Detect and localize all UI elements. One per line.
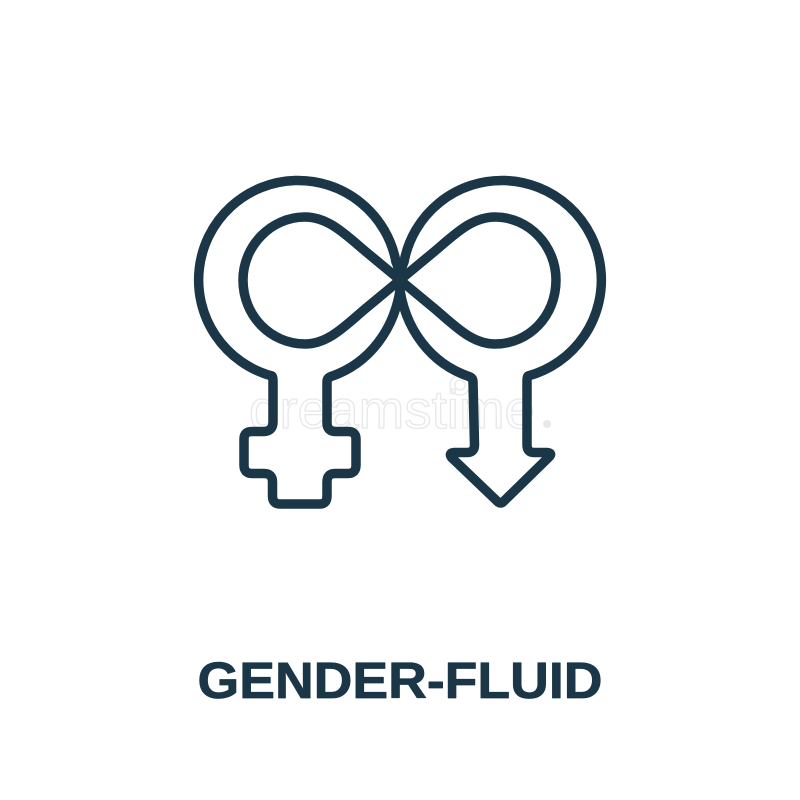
icon: gender-fluid symbol <box>199 180 601 504</box>
watermark: dreamstime <box>249 380 535 440</box>
title: GENDER-FLUID <box>198 652 602 709</box>
icon: infinity loop <box>243 217 556 344</box>
icon: female symbol outline with cross <box>199 180 401 504</box>
icon: male symbol outline with arrow <box>399 180 601 503</box>
